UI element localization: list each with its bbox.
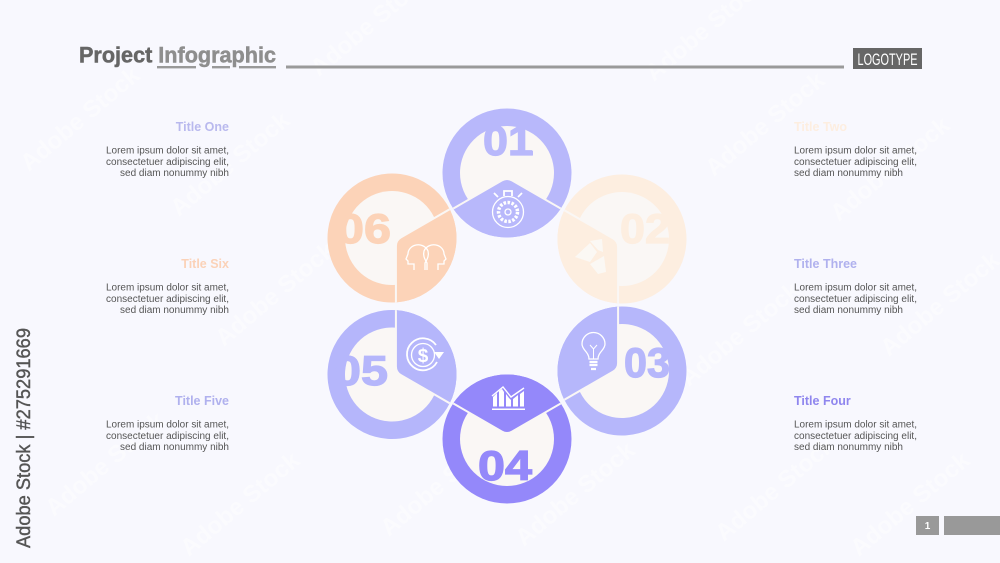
text: Adobe Stock — [40, 406, 171, 522]
text block: title four: Lorem ipsum dolor sit amet, — [794, 420, 917, 430]
segment 04: 04 — [478, 442, 533, 489]
text block: title five: Title Five — [175, 394, 229, 408]
text block: title three: Title Three — [794, 257, 857, 271]
text block: title three — [794, 257, 917, 316]
segment 01 — [442, 108, 572, 238]
text: Adobe Stock — [165, 106, 296, 222]
text block: title one: sed diam nonummy nibh — [120, 168, 229, 179]
icon: stopwatch — [492, 191, 524, 228]
text: Adobe Stock — [675, 276, 806, 392]
segment 03: 03 — [624, 339, 670, 386]
text block: title two — [794, 120, 917, 179]
text block: title four: consectetuer adipiscing elit, — [794, 431, 917, 442]
text block: title two: Lorem ipsum dolor sit amet, — [794, 146, 917, 156]
text block: title six — [106, 257, 229, 316]
text block: title six: Lorem ipsum dolor sit amet, — [106, 282, 229, 294]
text block: title five — [106, 394, 229, 453]
text block: title two: Title Two — [794, 120, 847, 134]
icon: light bulb — [582, 332, 605, 369]
text block: title five: Lorem ipsum dolor sit amet, — [106, 420, 229, 430]
page number — [916, 516, 939, 535]
header rule — [286, 66, 844, 68]
stock credit: Adobe Stock | #275291669 — [14, 328, 35, 548]
text block: title five: consectetuer adipiscing elit, — [106, 431, 229, 442]
icon: bar chart — [492, 387, 525, 410]
icon: dollar cycle: $ — [418, 346, 429, 367]
text block: title one: consectetuer adipiscing elit, — [106, 157, 229, 168]
segment 05: 05 — [334, 347, 388, 394]
segment 01: 01 — [483, 117, 533, 164]
text: Adobe Stock — [375, 426, 506, 542]
text: Adobe Stock — [15, 61, 146, 177]
text block: title one — [106, 120, 229, 179]
footer bar — [944, 516, 1000, 535]
segment 06: 06 — [337, 205, 391, 252]
text: Adobe Stock — [845, 446, 976, 562]
text: Adobe Stock — [210, 236, 341, 352]
text: Adobe Stock — [510, 436, 641, 552]
text block: title five: sed diam nonummy nibh — [120, 442, 229, 453]
text block: title six: sed diam nonummy nibh — [120, 305, 229, 316]
text block: title three: consectetuer adipiscing elit, — [794, 294, 917, 305]
text: Adobe Stock — [710, 431, 841, 547]
text block: title one: Title One — [176, 120, 229, 134]
segment 05 — [328, 310, 456, 439]
segment 02: 02 — [620, 205, 670, 252]
icon: puzzle — [575, 239, 606, 274]
text block: title four: sed diam nonummy nibh — [794, 442, 903, 453]
text: Adobe Stock — [175, 446, 306, 562]
text: Adobe Stock — [825, 111, 956, 227]
segment 06 — [328, 174, 456, 302]
logotype — [853, 48, 922, 69]
icon: two heads — [406, 245, 446, 270]
text block: title six: consectetuer adipiscing elit, — [106, 294, 229, 305]
segment 02 — [558, 174, 686, 304]
logotype: LOGOTYPE — [858, 50, 918, 69]
page number: 1 — [925, 521, 931, 532]
text: Adobe Stock — [700, 66, 831, 182]
text block: title three: sed diam nonummy nibh — [794, 305, 903, 316]
text block: title six: Title Six — [181, 257, 229, 271]
text block: title four — [794, 394, 917, 453]
icon: dollar cycle — [407, 338, 444, 370]
text block: title four: Title Four — [794, 394, 851, 408]
segment 03 — [558, 306, 686, 436]
text block: title one: Lorem ipsum dolor sit amet, — [106, 146, 229, 156]
text block: title two: sed diam nonummy nibh — [794, 168, 903, 179]
segment 04 — [442, 374, 572, 504]
text block: title three: Lorem ipsum dolor sit amet, — [794, 282, 917, 294]
text block: title two: consectetuer adipiscing elit, — [794, 157, 917, 168]
title: Project Infographic — [79, 42, 276, 68]
